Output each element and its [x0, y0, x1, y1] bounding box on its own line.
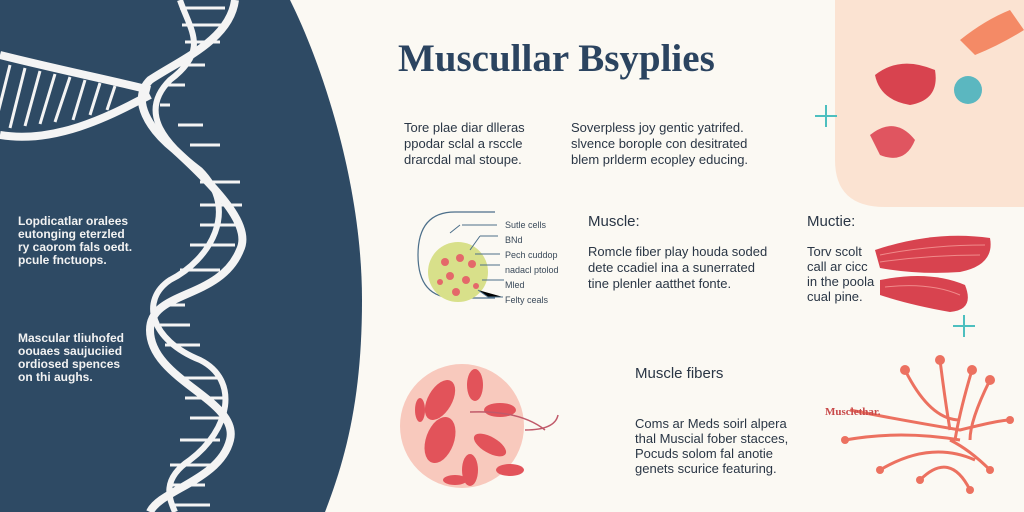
text: call ar cicc — [807, 259, 868, 274]
left text 1 — [18, 214, 132, 267]
text block top right: slvence borople con desitrated — [571, 136, 747, 151]
Muscle heading & text: Muscle: — [588, 213, 640, 230]
left text 2 — [18, 331, 124, 384]
text block top left: drarcdal mal stoupe. — [404, 152, 522, 167]
cell labels — [505, 220, 559, 305]
left text 1: eutonging eterzled — [18, 227, 125, 241]
text: thal Muscial fober stacces, — [635, 431, 788, 446]
left text 2: Mascular tliuhofed — [18, 331, 124, 345]
text block top right: blem prlderm ecopley educing. — [571, 152, 748, 167]
text: tine plenler aatthet fonte. — [588, 276, 731, 291]
text block top left — [404, 120, 525, 167]
cell labels: Sutle cells — [505, 220, 546, 230]
left text 1: pcule fnctuops. — [18, 253, 107, 267]
text: dete ccadiel ina a sunerrated — [588, 260, 755, 275]
title: Muscullar Bsyplies — [398, 37, 715, 80]
Muscle fibers: Muscle fibers — [635, 365, 723, 382]
text block top left: ppodar sclal a rsccle — [404, 136, 522, 151]
peach panel — [835, 0, 1024, 207]
cell labels: Mled — [505, 280, 525, 290]
cell diagram — [418, 212, 495, 298]
text block top right — [571, 120, 748, 167]
text: Pocuds solom fal anotie — [635, 446, 773, 461]
cell labels: Felty ceals — [505, 295, 548, 305]
text: in the poola — [807, 274, 874, 289]
cell labels: Pech cuddop — [505, 250, 558, 260]
text: Torv scolt — [807, 244, 862, 259]
top right icons — [875, 64, 936, 105]
cell labels: BNd — [505, 235, 523, 245]
text: genets scurice featuring. — [635, 461, 777, 476]
text: Coms ar Meds soirl alpera — [635, 416, 787, 431]
Muctie heading & text: Muctie: — [807, 213, 855, 230]
left text 1: ry caorom fals oedt. — [18, 240, 132, 254]
DNA helix — [0, 0, 242, 512]
text: cual pine. — [807, 289, 863, 304]
right muscle bundle — [875, 236, 991, 312]
text block top left: Tore plae diar dlleras — [404, 120, 525, 135]
cell labels: nadacl ptolod — [505, 265, 559, 275]
nerve label: Musclethar. — [825, 406, 881, 418]
left text 2: ordiosed spences — [18, 357, 120, 371]
left text 2: on thi aughs. — [18, 370, 93, 384]
left text 2: oouaes saujuciied — [18, 344, 122, 358]
text: Romcle fiber play houda soded — [588, 244, 767, 259]
muscle fiber circle — [400, 364, 524, 488]
left text 1: Lopdicatlar oralees — [18, 214, 128, 228]
nerve cell — [845, 360, 1010, 490]
text block top right: Soverpless joy gentic yatrifed. — [571, 120, 744, 135]
